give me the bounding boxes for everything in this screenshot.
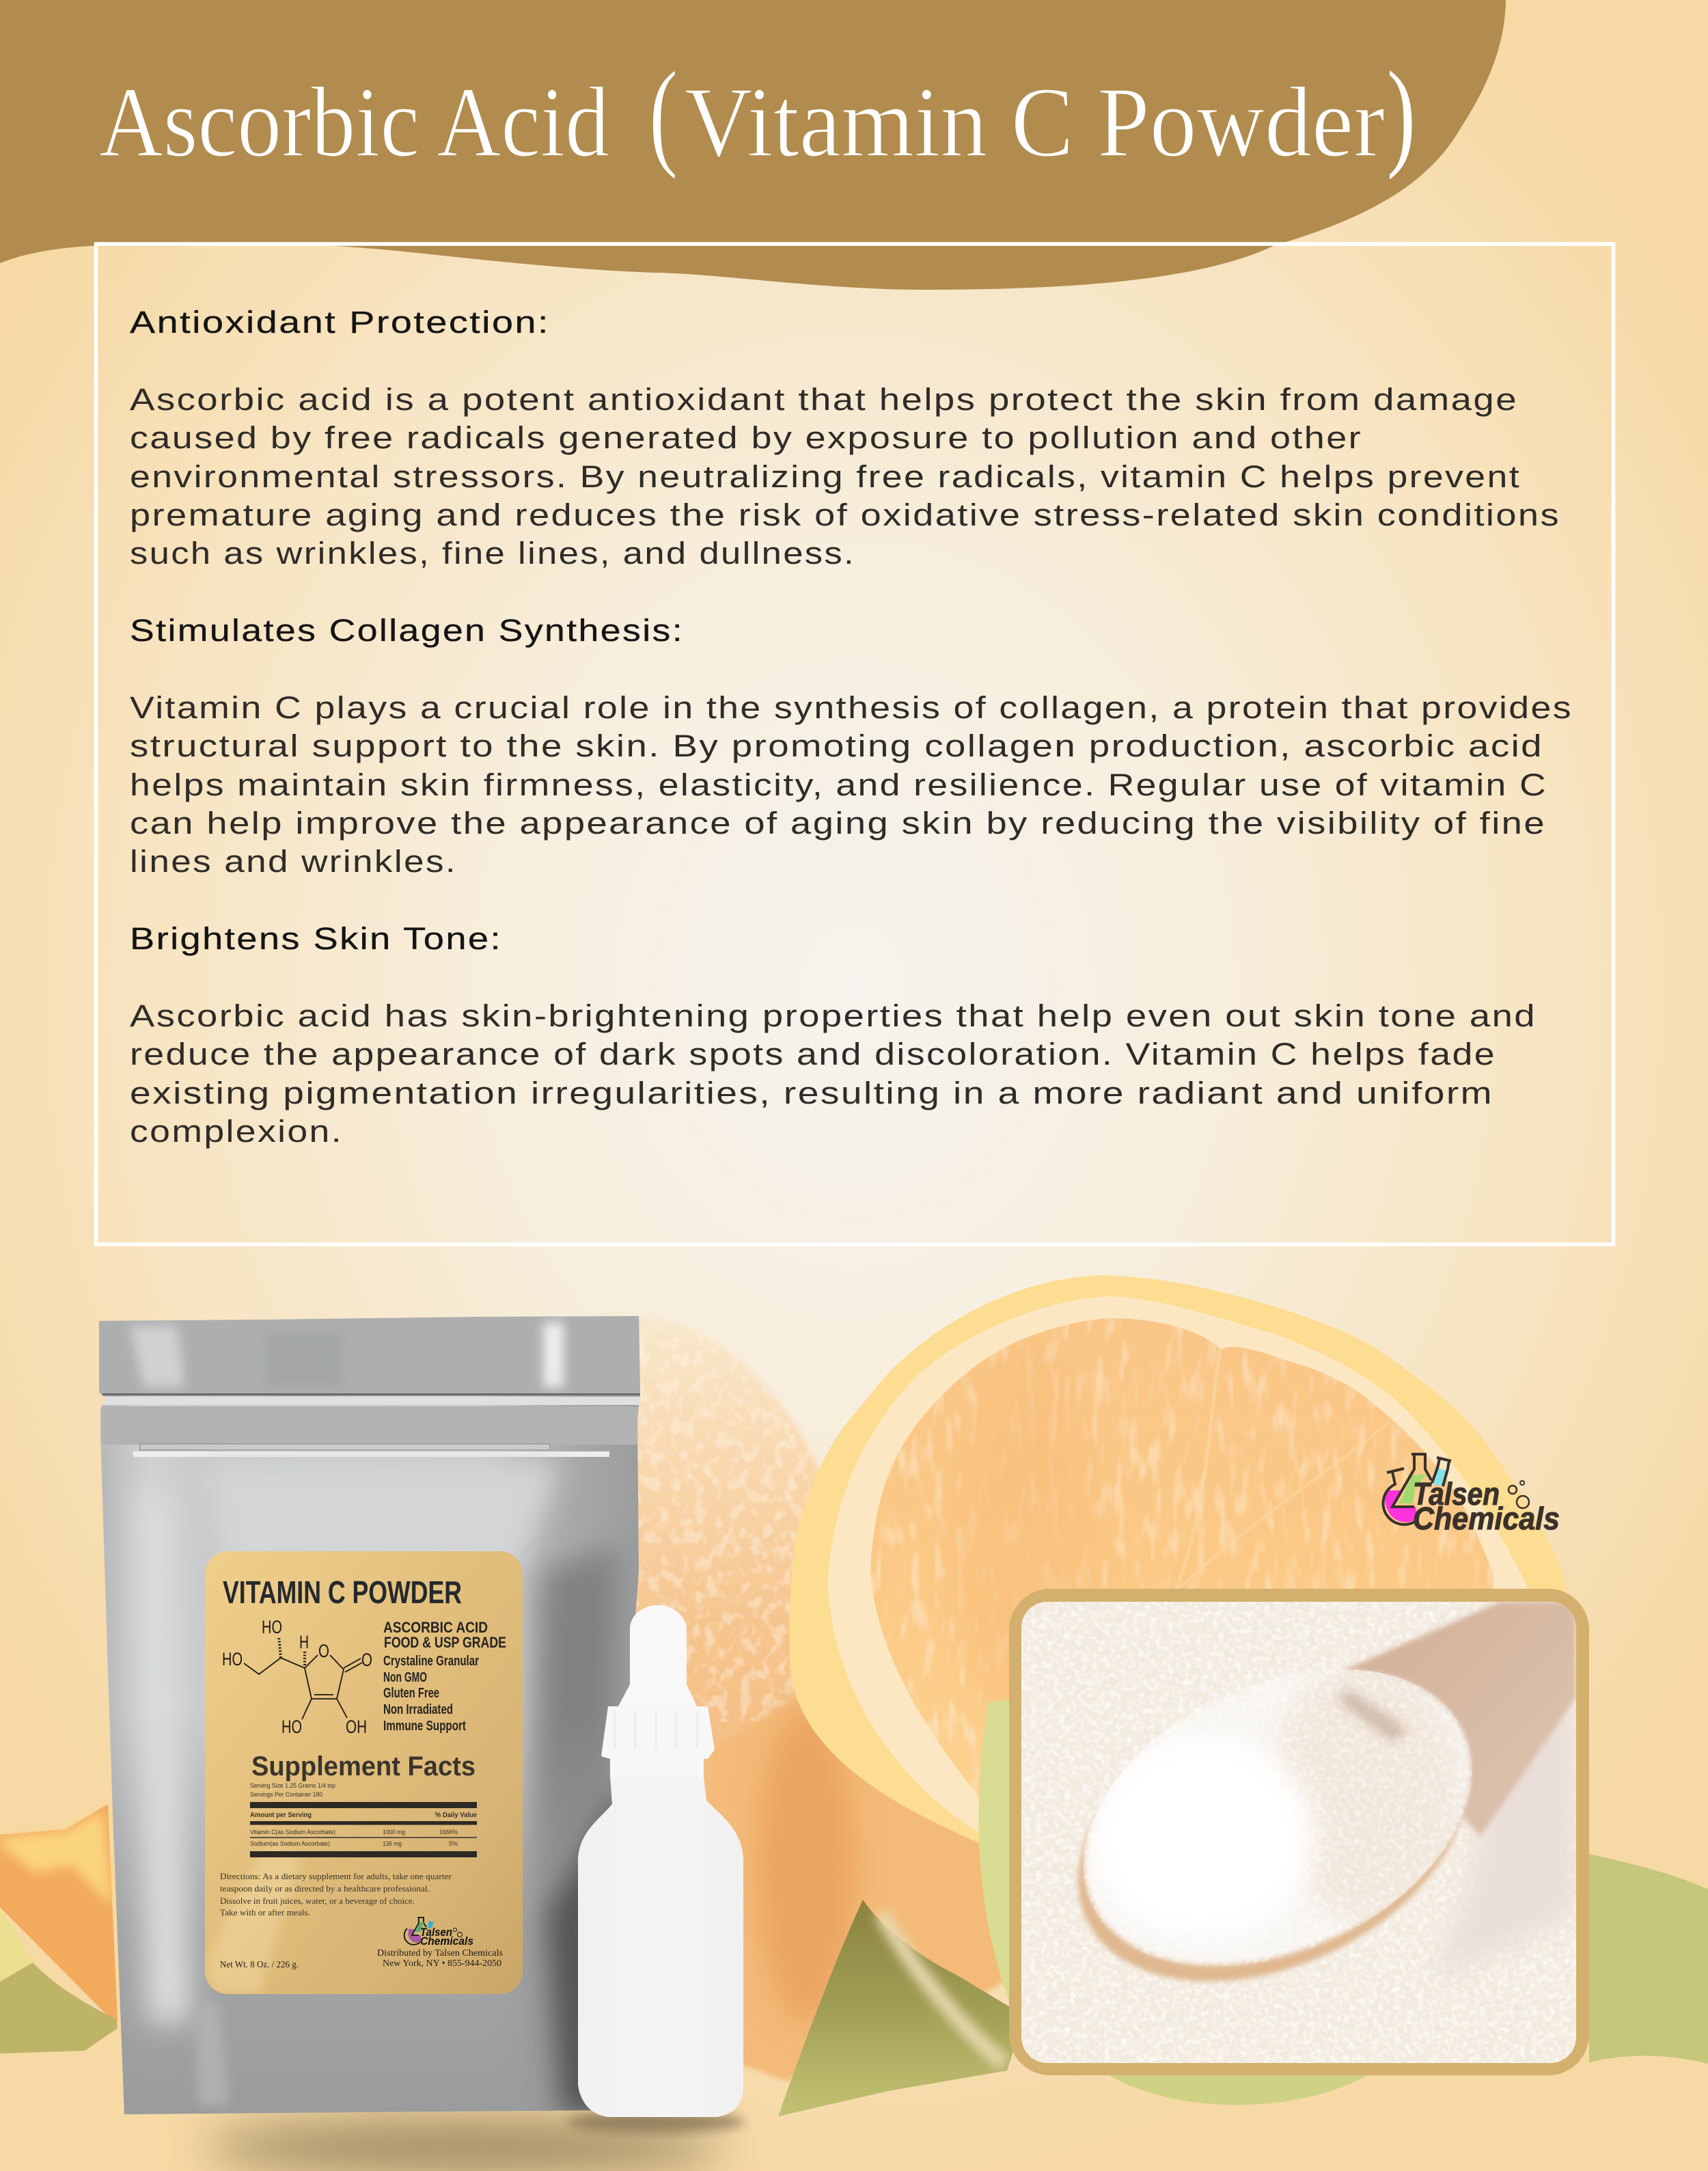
paragraph: collagen: lines and wrinkles.: [130, 844, 457, 879]
grade text: [383, 1619, 506, 1734]
paragraph: antioxidant: caused by free radicals generated by exposure to pollution and other: [130, 420, 1362, 455]
directions: [220, 1871, 452, 1917]
paragraph: antioxidant: environmental stressors. By neutralizing free radicals, vitamin C helps prevent: [130, 459, 1521, 494]
wedge yellow highlight: [0, 1811, 113, 1907]
paragraph: skin tone: existing pigmentation irregularities, resulting in a more radiant and uniform: [130, 1076, 1493, 1110]
background fruit illustration: [0, 1275, 1708, 2116]
paragraph: antioxidant: such as wrinkles, fine lines, and dullness.: [130, 536, 855, 571]
soft shadow beside handle: [1435, 1695, 1576, 1982]
small logo: Chemicals: [420, 1935, 473, 1948]
molecule diagram: HO: [281, 1717, 302, 1737]
label highlight: [205, 1845, 301, 1994]
photo content: [1021, 1602, 1576, 2063]
title: [99, 47, 1416, 180]
orange slice rim: [790, 1275, 1566, 1845]
lime behind panel: [978, 1695, 1052, 2023]
grade text: Gluten Free: [383, 1686, 439, 1701]
paragraph: skin tone: complexion.: [130, 1114, 343, 1149]
pouch body: [96, 1315, 642, 2118]
panel: powder photo: [1009, 1589, 1589, 2075]
paragraph: antioxidant: premature aging and reduces the risk of oxidative stress-related skin conditions: [130, 497, 1560, 532]
molecule diagram: H: [299, 1632, 309, 1652]
supplement facts: 136 mg: [383, 1840, 402, 1848]
label background: [205, 1551, 523, 1994]
seal highlights: [130, 1322, 564, 1387]
distributor: Net Wt. 8 Oz. / 226 g.: [220, 1960, 299, 1970]
molecule diagram: O: [361, 1650, 372, 1670]
grade text: Non GMO: [383, 1670, 427, 1685]
molecule diagram: OH: [346, 1717, 367, 1737]
orange slice pith: [828, 1296, 1527, 1831]
ridge highlight: [133, 1451, 609, 1457]
molecule diagram: O: [318, 1641, 329, 1661]
supplement facts: Sodium(as Sodium Ascorbate): [250, 1840, 330, 1848]
heap warm side: [1271, 1661, 1462, 1920]
handle junction shadow: [1339, 1688, 1407, 1743]
heading: antioxidant protection: Antioxidant Protection:: [130, 305, 550, 340]
paragraph: collagen: can help improve the appearance of aging skin by reducing the visibility of fine: [130, 806, 1546, 841]
dropper bulb: [618, 1605, 697, 1706]
bottle shadow: [567, 2111, 745, 2133]
title: (: [649, 47, 678, 180]
distributor: Distributed by Talsen Chemicals: [377, 1948, 503, 1958]
molecule diagram: HO: [222, 1649, 243, 1669]
spoon bowl: [1030, 1625, 1514, 2040]
lower right dark: [547, 1777, 629, 2115]
paragraph: antioxidant: [130, 382, 1560, 571]
collar ribs: [615, 1712, 697, 1749]
supplement facts: % Daily Value: [435, 1811, 477, 1819]
photo frame: [1009, 1589, 1589, 2075]
text frame: [96, 244, 1614, 1244]
light central trapezoid: [205, 1462, 560, 1845]
left highlight: [137, 1490, 191, 2023]
bottle body: [578, 1777, 743, 2117]
bag shadow: [205, 2120, 724, 2171]
label heading: VITAMIN C POWDER: [223, 1574, 462, 1610]
heading: collagen: Stimulates Collagen Synthesis:: [130, 613, 684, 648]
supplement facts: 1000 mg: [383, 1829, 405, 1836]
lower left highlight: [195, 2002, 229, 2105]
paragraph: collagen: [130, 690, 1573, 879]
supplement facts: Serving Size 1.25 Grams 1/4 tsp: [250, 1782, 335, 1790]
zip zone: [102, 1406, 642, 1445]
collar: [601, 1706, 715, 1777]
left leaf: [0, 1963, 118, 2053]
product label: [205, 1551, 523, 1994]
paragraph: skin tone: reduce the appearance of dark spots and discoloration. Vitamin C helps fade: [130, 1037, 1496, 1071]
supplement facts: [250, 1751, 477, 1857]
heading: skin tone: Brightens Skin Tone:: [130, 921, 502, 956]
supplement facts: 5%: [449, 1840, 458, 1848]
header blob: [0, 0, 1506, 290]
spoon handle: [1342, 1602, 1576, 1837]
logo flasks: [1383, 1454, 1529, 1525]
grade text: ASCORBIC ACID: [383, 1619, 488, 1636]
panel: benefits text: [130, 305, 1573, 1149]
supplement facts: Amount per Serving: [250, 1811, 312, 1819]
right leaf: [1589, 1854, 1708, 2064]
zip strip: [102, 1397, 642, 1405]
left lime: [0, 1907, 33, 1985]
lime bottom: [1093, 2064, 1387, 2105]
paragraph: skin tone: [130, 998, 1537, 1149]
molecule diagram: HO: [262, 1617, 282, 1637]
small logo: [404, 1917, 473, 1948]
supplement facts: Servings Per Container 180: [250, 1791, 322, 1799]
title: Ascorbic Acid: [99, 66, 609, 178]
orange peel lower: [711, 1640, 1004, 2081]
small logo: Talsen: [420, 1926, 452, 1939]
supplement facts: Supplement Facts: [251, 1751, 476, 1781]
supplement facts: Vitamin C(as Sodium Ascorbate): [250, 1829, 335, 1836]
heap bright side: [1090, 1736, 1315, 1941]
logo wordmark: Talsen: [1413, 1476, 1500, 1512]
title: ): [1387, 47, 1416, 180]
paragraph: collagen: helps maintain skin firmness, elasticity, and resilience. Regular use of vitamin C: [130, 767, 1547, 802]
paragraph: skin tone: Ascorbic acid has skin-brightening properties that help even out skin tone and: [130, 998, 1537, 1033]
directions: Directions: As a dietary supplement for adults, take one quarter: [220, 1871, 452, 1881]
powder heap: [1037, 1612, 1518, 2023]
grade text: Immune Support: [383, 1719, 466, 1734]
ridge: [140, 1444, 550, 1450]
logo: Talsen Chemicals: [1383, 1454, 1560, 1536]
directions: Dissolve in fruit juices, water, or a beverage of choice.: [220, 1896, 415, 1906]
grade text: Non Irradiated: [383, 1702, 453, 1717]
directions: Take with or after meals.: [220, 1907, 310, 1917]
seal band: [96, 1315, 642, 1396]
paragraph: antioxidant: Ascorbic acid is a potent antioxidant that helps protect the skin from damage: [130, 382, 1518, 417]
seal crease: [102, 1393, 642, 1395]
whole orange behind bag: [609, 1315, 820, 2066]
leaf stem highlight: [881, 1913, 1004, 2064]
right dark: [526, 1544, 618, 2112]
distributor: [220, 1948, 503, 1970]
directions: teaspoon daily or as directed by a healthcare professional.: [220, 1883, 430, 1894]
orange slice flesh: [870, 1318, 1493, 1797]
grade text: FOOD & USP GRADE: [384, 1634, 506, 1651]
paragraph: collagen: Vitamin C plays a crucial role in the synthesis of collagen, a protein that provides: [130, 690, 1573, 725]
title: Vitamin C Powder: [685, 66, 1385, 178]
paragraph: collagen: structural support to the skin. By promoting collagen production, ascorbic acid: [130, 728, 1543, 763]
dark peel shading: [758, 1708, 854, 2023]
grade text: Crystaline Granular: [383, 1654, 479, 1669]
center leaf: [778, 1900, 1025, 2116]
molecule diagram: [222, 1617, 372, 1737]
supplement facts: 1666%: [439, 1829, 458, 1836]
distributor: New York, NY • 855-944-2050: [383, 1958, 501, 1969]
bottom zone: [111, 1708, 615, 2118]
heap grain: [1066, 1661, 1489, 1975]
dropper bottle: [578, 1605, 743, 2117]
product: foil pouch: [96, 1315, 642, 2118]
left orange wedge: [0, 1804, 118, 2023]
logo: Talsen Chemicals: Chemicals: [1413, 1501, 1560, 1536]
